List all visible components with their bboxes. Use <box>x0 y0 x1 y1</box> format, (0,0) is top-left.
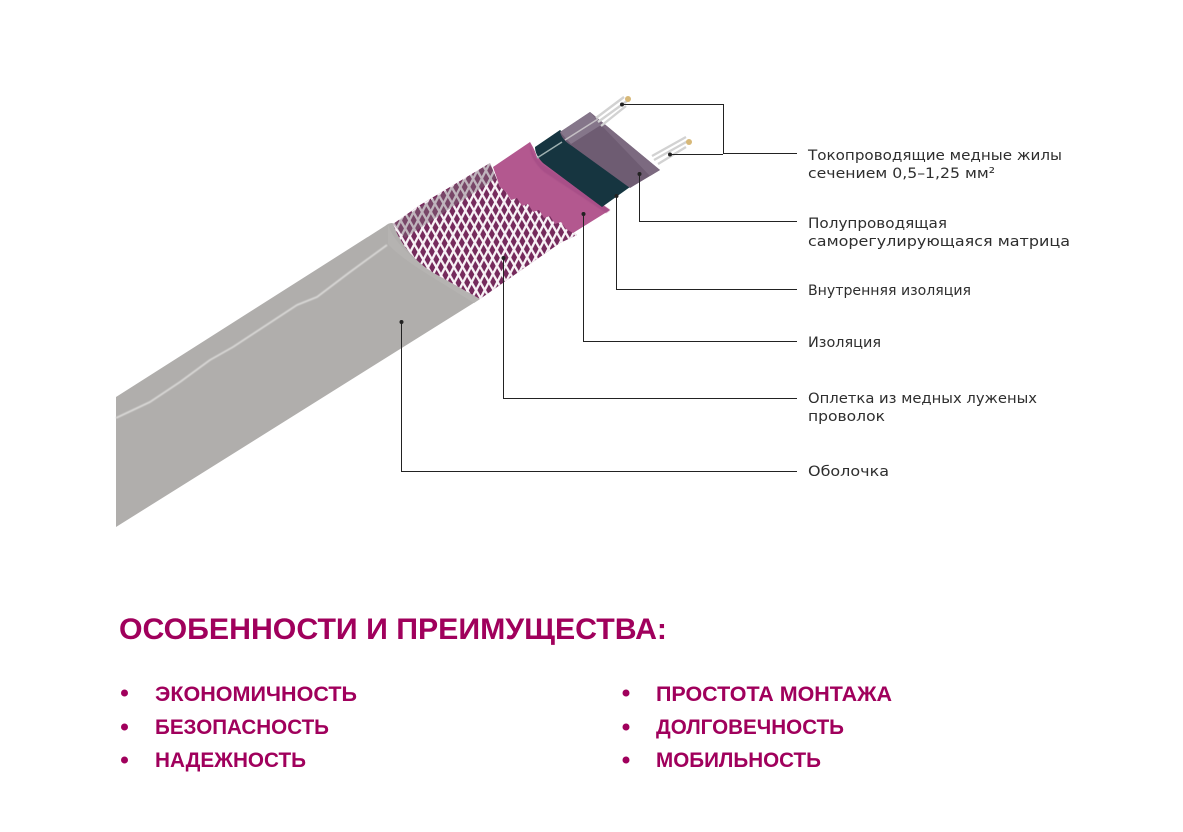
item: economy: ЭКОНОМИЧНОСТЬ <box>155 682 357 706</box>
cable layer: inner insulation <box>535 130 630 207</box>
item: durability: ДОЛГОВЕЧНОСТЬ <box>656 715 844 739</box>
label: conductors <box>807 148 1062 182</box>
label: insulation: Изоляция <box>808 335 881 351</box>
label: matrix: Полупроводящая <box>808 216 947 232</box>
leader: inner insulation <box>614 194 797 290</box>
cable layer: self-regulating matrix <box>560 112 660 188</box>
item: safety: БЕЗОПАСНОСТЬ <box>155 715 329 739</box>
item: mobility: МОБИЛЬНОСТЬ <box>656 748 821 772</box>
label: braid: проволок <box>808 409 885 425</box>
label: sheath: Оболочка <box>808 464 889 480</box>
label: conductors: Токопроводящие медные жилы <box>807 148 1062 164</box>
heading: ОСОБЕННОСТИ И ПРЕИМУЩЕСТВА: <box>119 613 667 646</box>
label: inner insulation: Внутренняя изоляция <box>808 283 971 299</box>
cable layer: upper copper conductor <box>596 96 631 126</box>
cable layer: insulation <box>493 142 610 233</box>
leader: copper conductors <box>620 102 797 156</box>
leader: matrix <box>638 172 797 222</box>
leader: insulation <box>582 212 797 342</box>
label: matrix: саморегулирующаяся матрица <box>808 234 1070 250</box>
leader: braid <box>502 256 797 398</box>
label: braid <box>808 391 1037 425</box>
cable layer: tinned copper braid <box>393 163 577 299</box>
illustration: heating cable <box>116 96 692 527</box>
leader: sheath <box>400 320 797 472</box>
list: left column <box>121 682 357 772</box>
item: easy installation: ПРОСТОТА МОНТАЖА <box>656 682 892 706</box>
list: right column <box>622 682 892 772</box>
label: conductors: сечением 0,5–1,25 мм² <box>808 166 995 182</box>
cable layer: outer sheath <box>116 223 480 527</box>
label: matrix <box>808 216 1070 250</box>
item: reliability: НАДЕЖНОСТЬ <box>155 748 306 772</box>
label: braid: Оплетка из медных луженых <box>808 391 1037 407</box>
cable layer: lower copper conductor <box>652 137 692 164</box>
